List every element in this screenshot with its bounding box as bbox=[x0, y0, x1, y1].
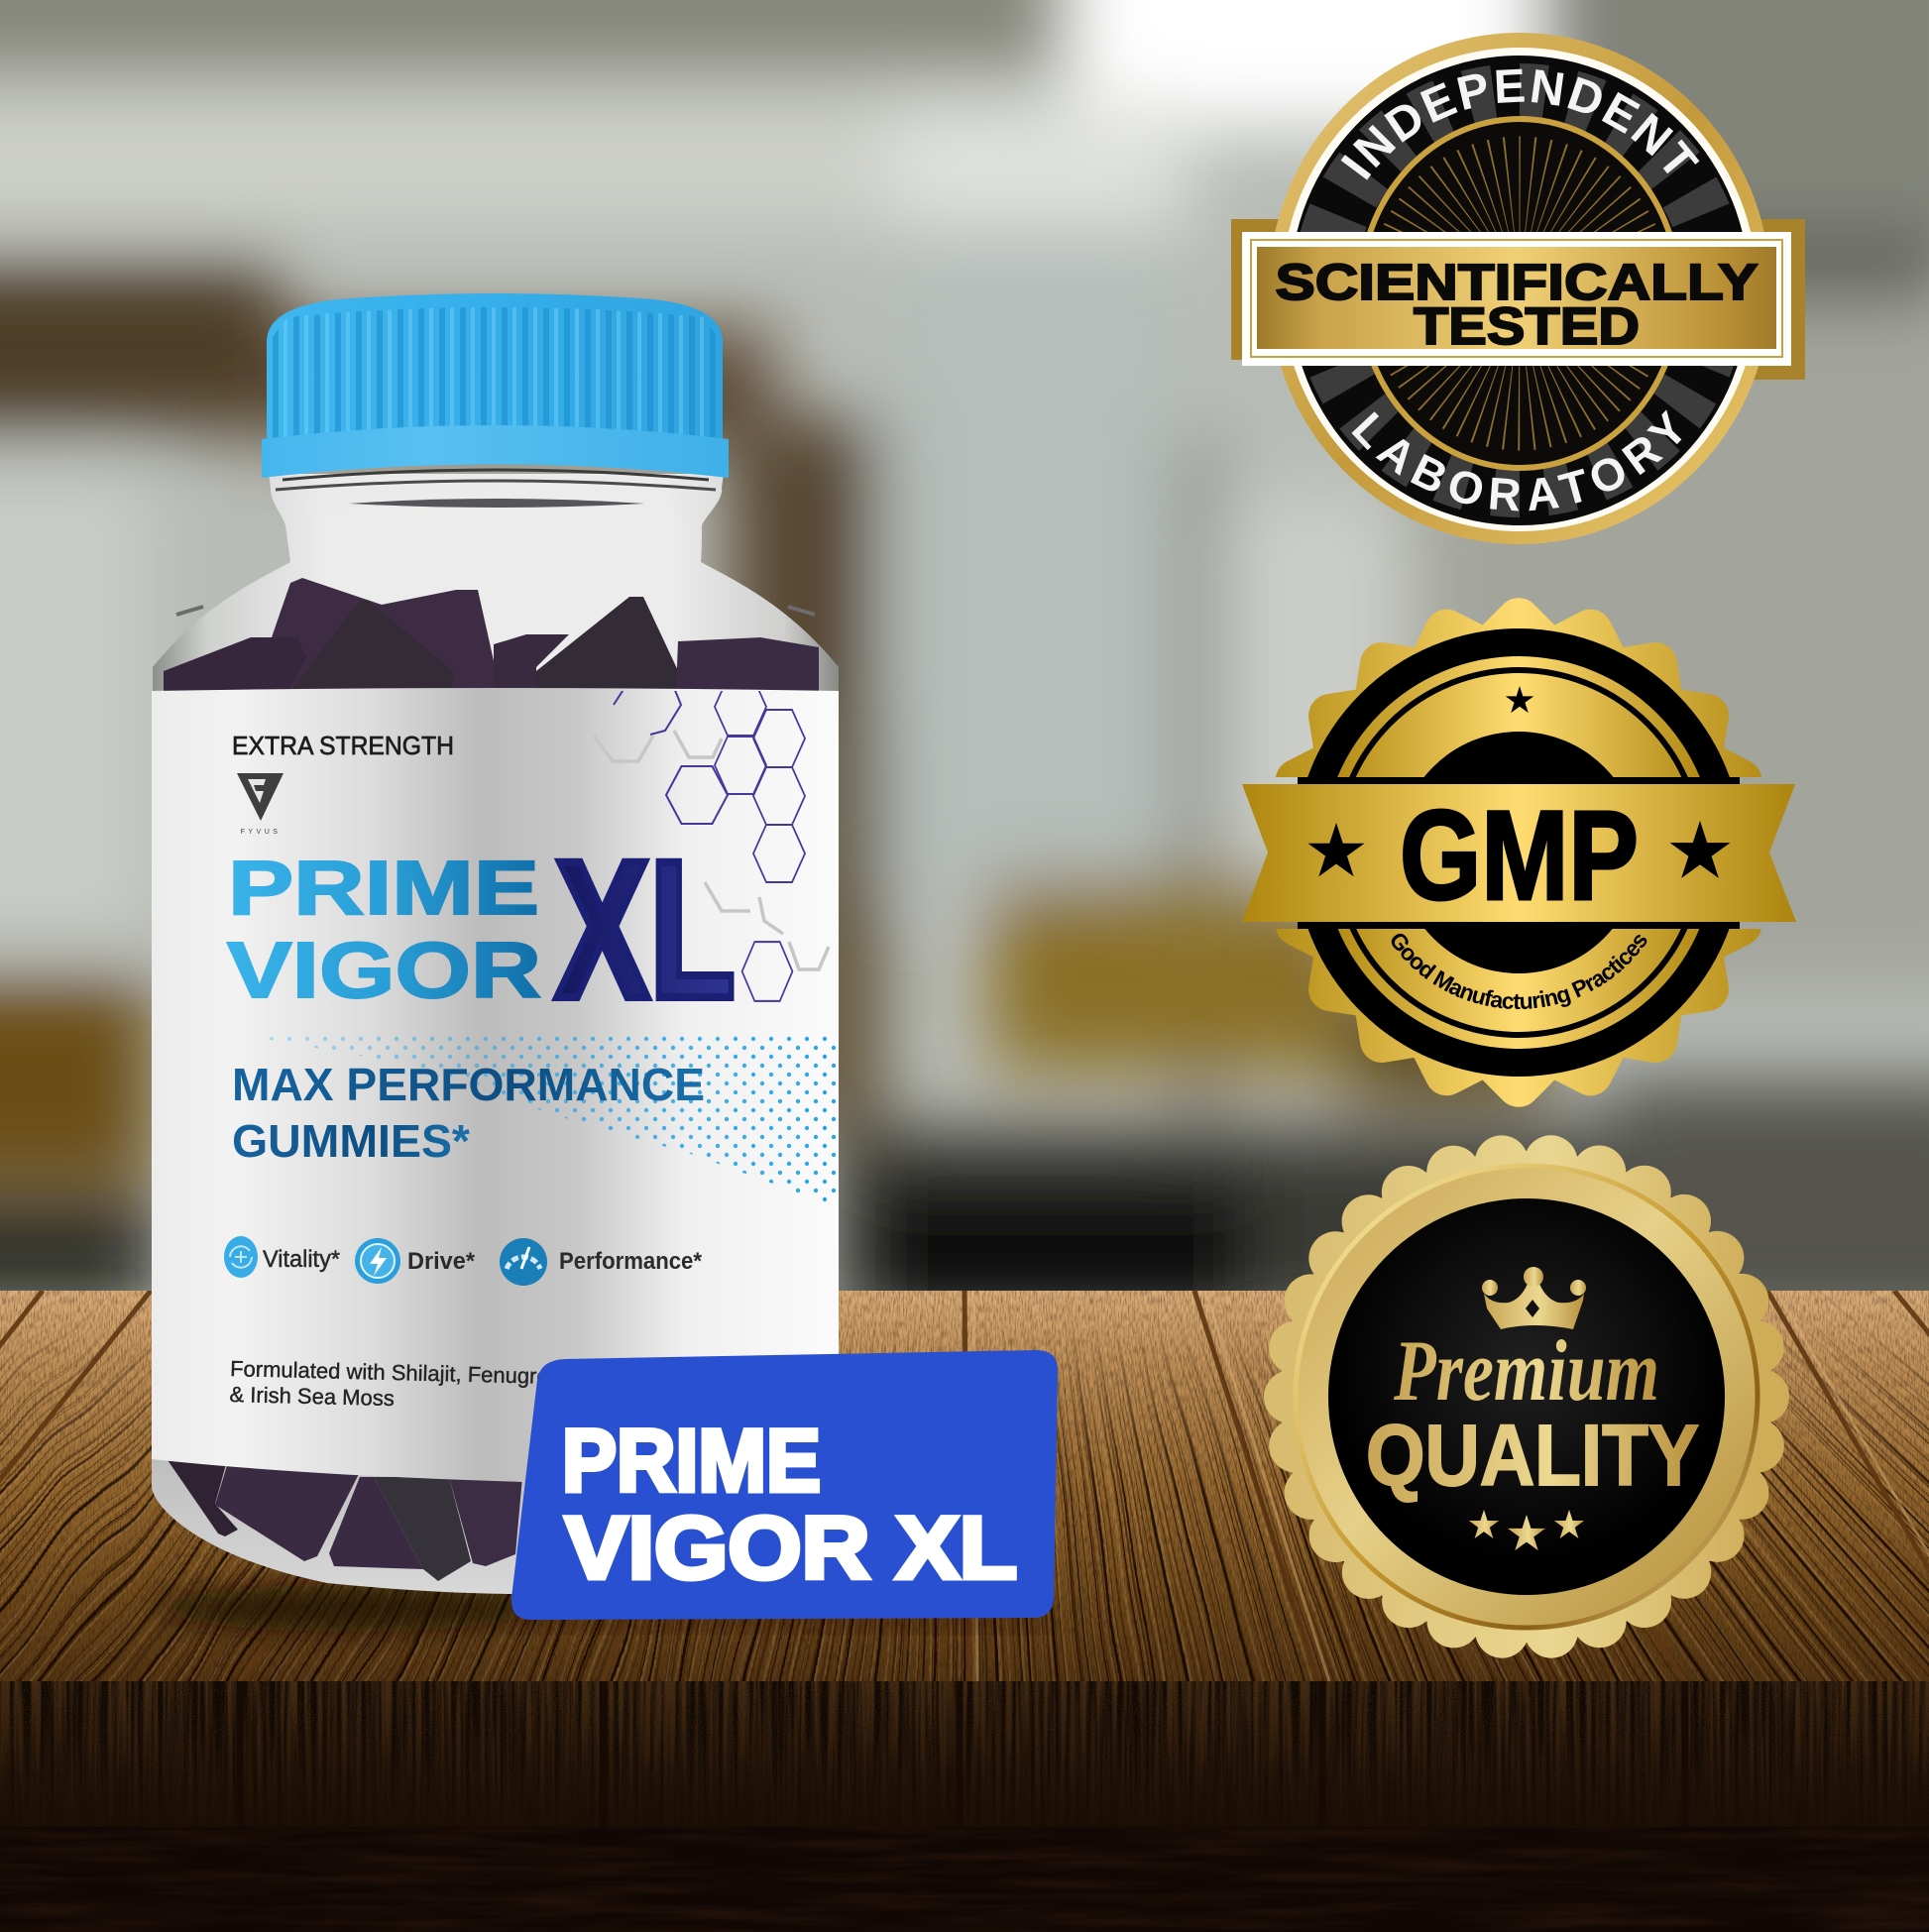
glass jar body bbox=[153, 474, 839, 1460]
center dome bbox=[1398, 732, 1640, 973]
GMP text: GMP bbox=[1400, 785, 1639, 927]
product name: VIGOR bbox=[227, 926, 541, 1014]
outer gold rim bbox=[1269, 33, 1770, 544]
tag text: VIGOR XL bbox=[565, 1498, 1017, 1597]
wooden table top bbox=[0, 1291, 1929, 1681]
sunburst rays bbox=[1450, 218, 1589, 369]
gummies bottom bbox=[166, 1457, 522, 1581]
benefit: drive bbox=[355, 1238, 476, 1284]
curved text: independent: INDEPENDENT bbox=[1340, 69, 1699, 180]
ingredients text bbox=[229, 1356, 573, 1415]
ribbon stars bbox=[1307, 823, 1365, 876]
gold tails behind banner bbox=[1231, 219, 1805, 380]
benefit: vitality: Vitality* bbox=[263, 1246, 340, 1273]
benefit: performance bbox=[500, 1238, 703, 1286]
dark table underside bbox=[0, 1827, 1929, 1932]
bottle label bbox=[152, 688, 839, 1482]
gold ribbon bbox=[1242, 784, 1796, 922]
badge: GMP bbox=[1242, 598, 1796, 1107]
black outer ring bbox=[1295, 628, 1743, 1077]
blue product name tag bbox=[511, 1350, 1058, 1620]
tag text bbox=[562, 1411, 1017, 1597]
halftone dots bbox=[253, 1037, 837, 1206]
gold starburst bbox=[1276, 598, 1761, 1107]
hexagon pattern bbox=[594, 678, 829, 1001]
bottle shadow on table bbox=[159, 1584, 535, 1632]
gummies top bbox=[164, 578, 819, 694]
gold inner ring bbox=[1360, 119, 1679, 468]
plank seams bbox=[0, 1291, 1929, 1681]
curved text: good manufacturing practices: Good Manufacturing Practices bbox=[1392, 934, 1647, 1009]
product subtitle bbox=[232, 1059, 705, 1167]
benefit: performance: Performance* bbox=[559, 1248, 703, 1275]
neck lines bbox=[176, 470, 815, 615]
product subtitle: MAX PERFORMANCE bbox=[232, 1059, 705, 1110]
white ring bbox=[1282, 48, 1758, 531]
product name: PRIME bbox=[228, 846, 539, 931]
bottle cap bbox=[262, 293, 729, 478]
tag text: PRIME bbox=[562, 1411, 821, 1510]
banner text bbox=[1275, 254, 1759, 356]
brand logo: FYVUS bbox=[241, 829, 281, 836]
product subtitle: GUMMIES* bbox=[232, 1115, 470, 1167]
scalloped gold seal bbox=[1281, 1151, 1772, 1643]
banner text: SCIENTIFICALLY bbox=[1275, 254, 1759, 310]
wooden table front edge bbox=[0, 1681, 1929, 1827]
benefit: drive: Drive* bbox=[407, 1248, 476, 1275]
brand logo bbox=[237, 773, 284, 836]
gold inner ring bbox=[1296, 1166, 1758, 1628]
glass base bbox=[152, 1455, 839, 1594]
ingredients text: Formulated with Shilajit, Fenugreek bbox=[230, 1356, 573, 1389]
black center bbox=[1328, 1198, 1725, 1595]
crown icon bbox=[1482, 1267, 1586, 1329]
extra strength text: EXTRA STRENGTH bbox=[232, 731, 454, 760]
curved text: laboratory: LABORATORY bbox=[1352, 409, 1681, 511]
benefit: vitality bbox=[224, 1236, 340, 1278]
supplement bottle bbox=[152, 293, 843, 1594]
three stars bbox=[1469, 1510, 1584, 1550]
tag shadow bbox=[515, 1614, 1051, 1626]
banner text: TESTED bbox=[1414, 297, 1640, 356]
ingredients text: & Irish Sea Moss bbox=[229, 1382, 395, 1411]
top star bbox=[1506, 686, 1533, 713]
quality text: QUALITY bbox=[1366, 1408, 1699, 1504]
premium script: Premium bbox=[1393, 1323, 1659, 1420]
badge: scientifically tested bbox=[1231, 33, 1805, 544]
banner bbox=[1242, 232, 1791, 366]
blurred room background bbox=[0, 0, 1929, 1328]
badge: premium quality bbox=[1281, 1151, 1772, 1643]
thin inner ring bbox=[1336, 670, 1701, 1035]
black ring with segments bbox=[1290, 56, 1750, 525]
product name: XL bbox=[555, 820, 736, 1039]
product name bbox=[227, 820, 736, 1039]
